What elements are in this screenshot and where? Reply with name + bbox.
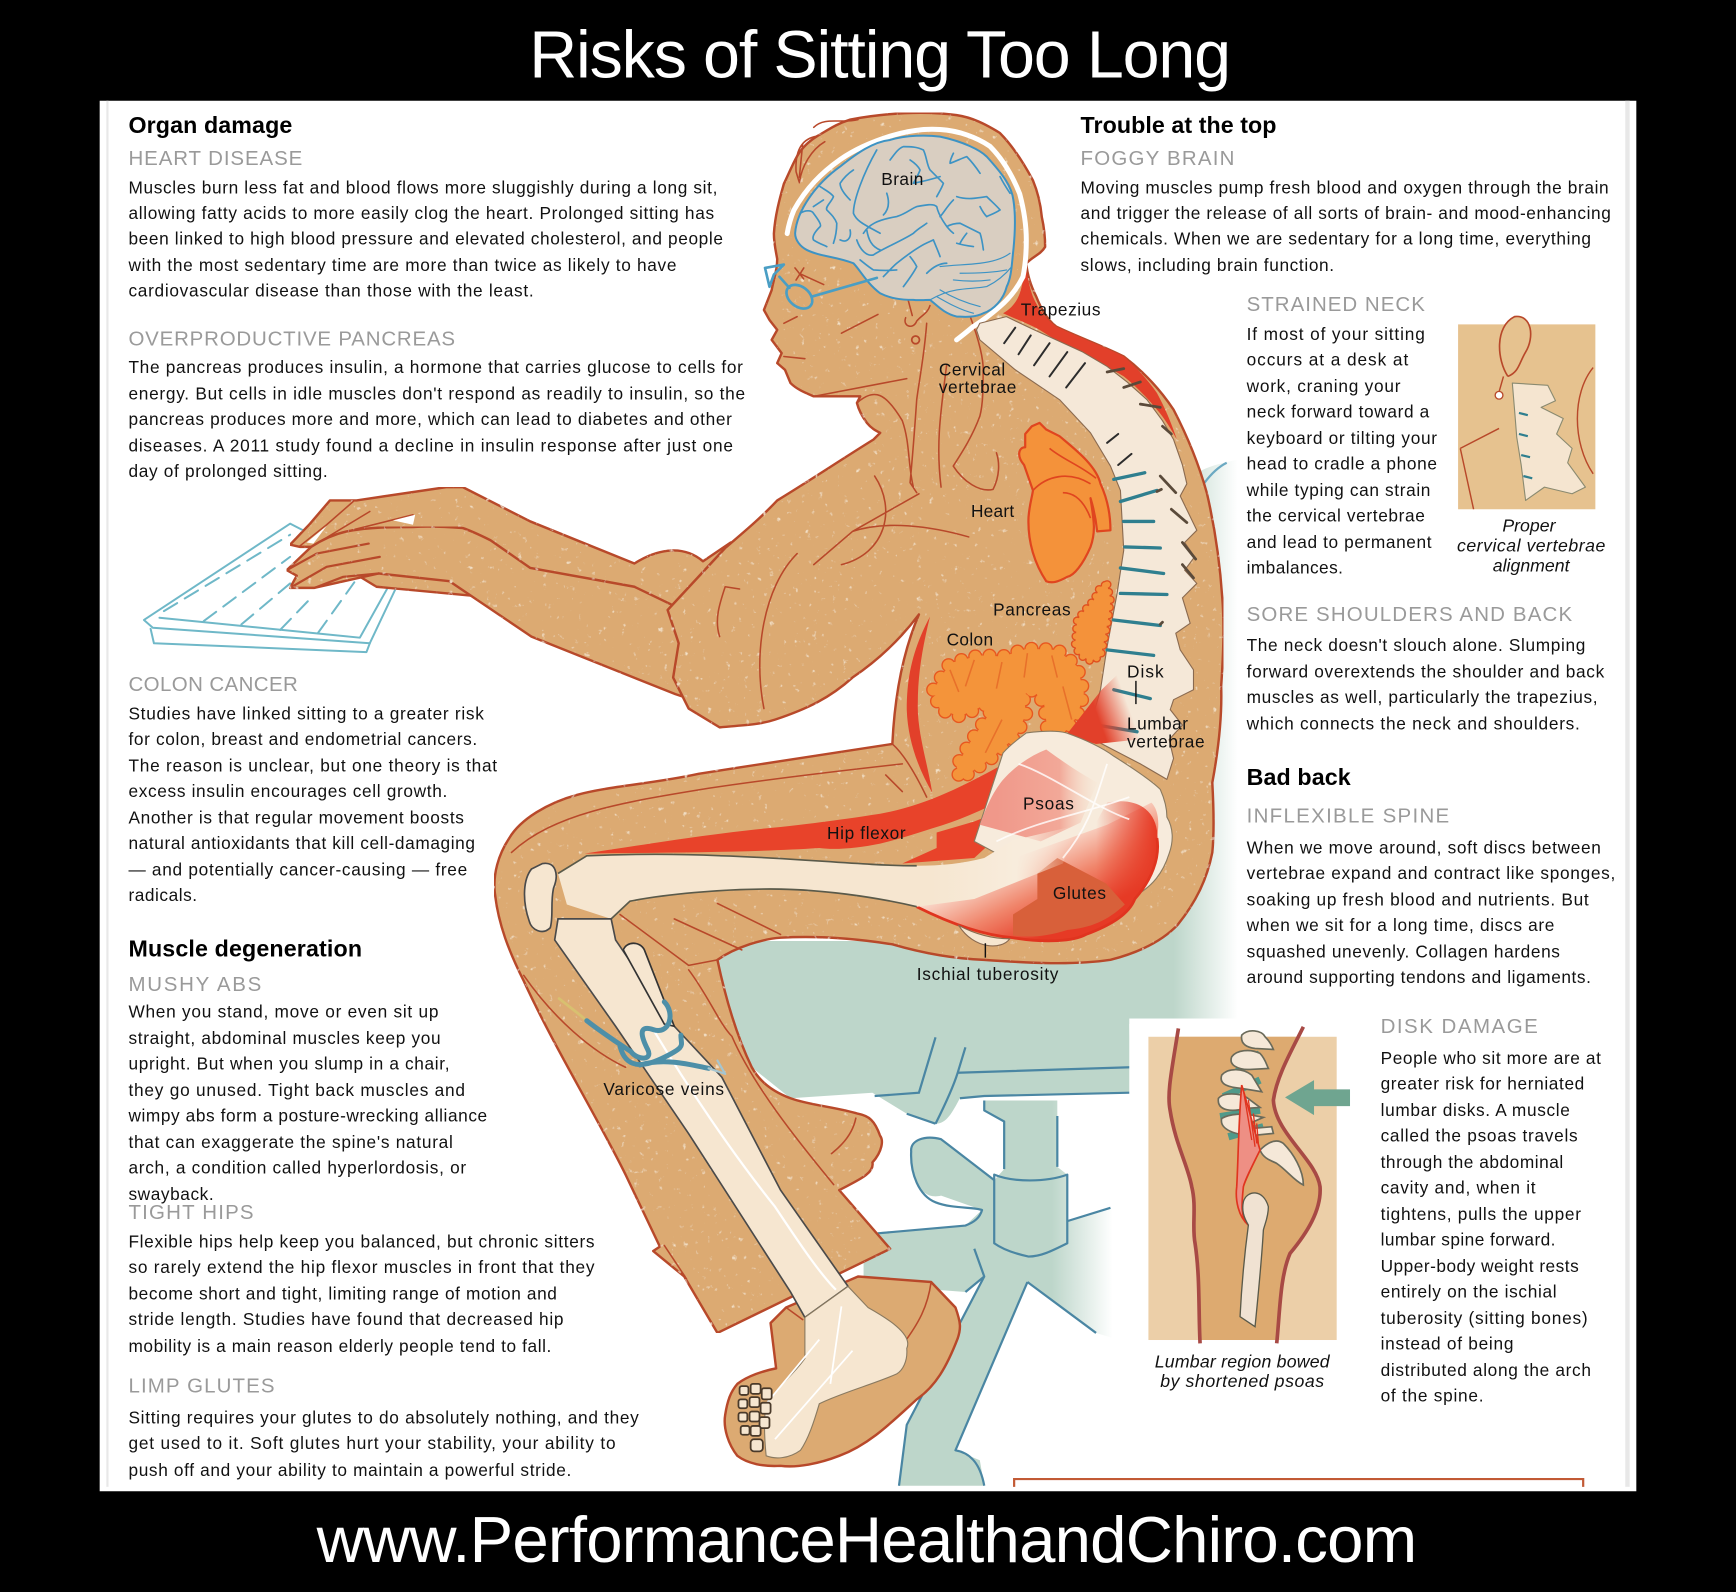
label: colon: Colon: [947, 629, 993, 649]
section: strained neck: and lead to permanent: [1247, 532, 1432, 552]
figure details: [512, 120, 999, 1279]
heart: [1019, 423, 1110, 582]
spine: [976, 317, 1197, 779]
section: disk damage: Upper-body weight rests: [1381, 1256, 1579, 1276]
section: tight hips: so rarely extend the hip flexor muscles in front that they: [128, 1257, 595, 1277]
section: foggy brain: chemicals. When we are sedentary for a long time, everything: [1081, 229, 1591, 249]
section: inflexible spine: around supporting tendons and ligaments.: [1247, 967, 1591, 987]
hip flexor muscle: [585, 766, 1013, 854]
skull line: [787, 129, 1026, 340]
section: mushy abs: [127, 973, 487, 1204]
chair post outlines: [878, 1100, 1110, 1486]
section: inflexible spine: [1246, 805, 1615, 987]
lumbar psoas attachment: [1066, 664, 1138, 744]
column: trouble at the top: [1081, 112, 1611, 734]
section: colon cancer: [128, 673, 497, 905]
section: tight hips: mobility is a main reason elderly people tend to fall.: [128, 1336, 551, 1356]
section: heart disease: HEART DISEASE: [128, 147, 302, 170]
varicose veins: [559, 999, 725, 1074]
foot and ankle skin: [725, 1276, 960, 1466]
near forearm and hand: [287, 527, 692, 700]
label: ischial tuberosity: Ischial tuberosity: [917, 964, 1059, 984]
ischial tuberosity leader: [984, 943, 986, 958]
chair base: [864, 1100, 1118, 1486]
section: strained neck: imbalances.: [1247, 557, 1343, 577]
section: disk damage: distributed along the arch: [1381, 1360, 1591, 1380]
section: tight hips: become short and tight, limiting range of motion and: [128, 1284, 557, 1304]
section: disk damage: tuberosity (sitting bones): [1381, 1308, 1588, 1328]
label: lumbar vertebrae: [1127, 714, 1205, 751]
website footer: www.PerformanceHealthandChiro.com: [316, 1503, 1417, 1576]
section: overproductive pancreas: pancreas produces more and more, which can lead to diabetes and other: [128, 409, 732, 429]
label: pancreas: Pancreas: [993, 600, 1071, 620]
section: overproductive pancreas: [128, 327, 745, 481]
section: strained neck: while typing can strain: [1246, 480, 1430, 500]
section: inflexible spine: soaking up fresh blood and nutrients. But: [1247, 890, 1589, 910]
section: strained neck: STRAINED NECK: [1247, 293, 1425, 316]
section: limp glutes: get used to it. Soft glutes hurt your stability, your ability to: [128, 1433, 616, 1453]
section: mushy abs: When you stand, move or even sit up: [128, 1001, 438, 1021]
section: mushy abs: wimpy abs form a posture-wrecking alliance: [127, 1105, 487, 1125]
section: colon cancer: natural antioxidants that kill cell-damaging: [128, 833, 475, 853]
section: strained neck: keyboard or tilting your: [1247, 428, 1437, 448]
section: inflexible spine: INFLEXIBLE SPINE: [1247, 805, 1449, 828]
keyboard: [144, 524, 400, 652]
gaps between hands: [307, 515, 415, 544]
figure body and trousers: [494, 113, 1223, 1333]
section: inflexible spine: vertebrae expand and contract like sponges,: [1247, 863, 1615, 883]
section: disk damage: lumbar disks. A muscle: [1381, 1100, 1570, 1120]
caption: lumbar region bowed: by shortened psoas: [1160, 1371, 1324, 1391]
section: limp glutes: Sitting requires your glutes to do absolutely nothing, and they: [128, 1408, 639, 1428]
section: colon cancer: COLON CANCER: [128, 673, 298, 696]
section: overproductive pancreas: The pancreas produces insulin, a hormone that carries glucose to cells for: [128, 357, 743, 377]
section: colon cancer: The reason is unclear, but one theory is that: [128, 756, 497, 776]
section: sore shoulders and back: muscles as well, particularly the trapezius,: [1247, 687, 1598, 707]
toes: [738, 1384, 772, 1451]
caption: proper cervical vertebrae alignment: [1457, 515, 1605, 575]
section: overproductive pancreas: day of prolonged sitting.: [128, 461, 328, 481]
pancreas: [1075, 585, 1110, 661]
glasses: [765, 265, 877, 313]
section: mushy abs: they go unused. Tight back muscles and: [128, 1080, 465, 1100]
section: colon cancer: Studies have linked sitting to a greater risk: [128, 704, 484, 724]
section: disk damage: instead of being: [1381, 1334, 1513, 1354]
section: heart disease: [127, 147, 723, 301]
title: Risks of Sitting Too Long: [529, 18, 1231, 92]
section: disk damage: entirely on the ischial: [1381, 1282, 1557, 1302]
section: overproductive pancreas: energy. But cells in idle muscles don't respond as readily to insulin, so the: [128, 384, 745, 404]
section: disk damage: tightens, pulls the upper: [1381, 1204, 1581, 1224]
section: strained neck: If most of your sitting: [1247, 324, 1425, 344]
section: sore shoulders and back: which connects the neck and shoulders.: [1246, 714, 1580, 734]
caption: proper cervical vertebrae alignment: alignment: [1493, 555, 1571, 575]
pelvis and glutes: [917, 731, 1172, 946]
section: foggy brain: Moving muscles pump fresh blood and oxygen through the brain: [1081, 178, 1609, 198]
colon: [933, 649, 1084, 779]
section: strained neck: work, craning your: [1246, 376, 1401, 396]
spine discs: [1097, 473, 1167, 732]
ischial bone: [959, 926, 1010, 946]
label: brain: Brain: [881, 169, 923, 189]
foot bones: [738, 1286, 908, 1458]
section: overproductive pancreas: diseases. A 2011 study found a decline in insulin response after just one: [128, 436, 733, 456]
section: heart disease: cardiovascular disease than those with the least.: [128, 281, 534, 301]
section: disk damage: called the psoas travels: [1381, 1125, 1578, 1145]
label: varicose veins: Varicose veins: [603, 1079, 724, 1099]
label: heart: Heart: [971, 501, 1014, 521]
section: mushy abs: that can exaggerate the spine's natural: [128, 1132, 453, 1152]
face lines: [784, 268, 878, 359]
section: mushy abs: straight, abdominal muscles keep you: [128, 1028, 441, 1048]
clothing folds: [512, 554, 927, 1279]
label: cervical vertebrae: [939, 359, 1016, 397]
tibia and fibula: [555, 919, 848, 1317]
white content panel: [100, 101, 1636, 1491]
femur: [558, 825, 1079, 919]
section: strained neck: neck forward toward a: [1247, 401, 1430, 421]
caption: proper cervical vertebrae alignment: cervical vertebrae: [1457, 535, 1605, 555]
label: cervical vertebrae: Cervical: [939, 359, 1005, 379]
label: lumbar vertebrae: Lumbar: [1127, 714, 1188, 734]
abdominal muscle: [907, 617, 932, 793]
caption: lumbar region bowed: [1155, 1351, 1331, 1391]
section: sore shoulders and back: forward overextends the shoulder and back: [1247, 662, 1605, 682]
heading: trouble at the top: Trouble at the top: [1081, 112, 1277, 138]
section: strained neck: head to cradle a phone: [1247, 453, 1437, 473]
section: mushy abs: arch, a condition called hyperlordosis, or: [128, 1158, 466, 1178]
inset: lumbar region: [1129, 1019, 1373, 1362]
label: trapezius: Trapezius: [1021, 300, 1101, 320]
section: colon cancer: — and potentially cancer-causing — free: [128, 860, 467, 880]
section: sore shoulders and back: [1246, 603, 1605, 734]
column: bad back: [1246, 764, 1615, 1406]
column: muscle degeneration: [127, 936, 639, 1480]
caption: proper cervical vertebrae alignment: Proper: [1502, 515, 1557, 535]
section: disk damage: [1381, 1015, 1601, 1406]
section: limp glutes: [128, 1375, 639, 1480]
heading: muscle degeneration: Muscle degeneration: [128, 936, 362, 962]
section: overproductive pancreas: OVERPRODUCTIVE PANCREAS: [128, 327, 455, 350]
section: colon cancer: for colon, breast and endometrial cancers.: [128, 729, 477, 749]
heading: organ damage: Organ damage: [128, 112, 292, 138]
section: disk damage: greater risk for herniated: [1381, 1073, 1584, 1093]
illustration: seated figure: [144, 113, 1238, 1486]
caption: lumbar region bowed: Lumbar region bowed: [1155, 1351, 1331, 1371]
section: inflexible spine: squashed unevenly. Collagen hardens: [1247, 942, 1560, 962]
section: disk damage: cavity and, when it: [1381, 1177, 1536, 1197]
label: glutes: Glutes: [1053, 883, 1106, 903]
section: mushy abs: swayback.: [128, 1184, 214, 1204]
hair bun: [796, 120, 858, 183]
chair: [709, 459, 1238, 1486]
section: mushy abs: upright. But when you slump in a chair,: [128, 1053, 450, 1073]
section: sore shoulders and back: SORE SHOULDERS AND BACK: [1247, 603, 1572, 626]
hair strands and neck lines: [814, 307, 999, 565]
section: heart disease: allowing fatty acids to more easily clog the heart. Prolonged sitting has: [128, 203, 714, 223]
label: hip flexor: Hip flexor: [827, 823, 906, 843]
section: disk damage: lumbar spine forward.: [1381, 1229, 1556, 1249]
section: heart disease: with the most sedentary time are more than twice as likely to have: [127, 255, 676, 275]
section: colon cancer: Another is that regular movement boosts: [128, 808, 464, 828]
section: tight hips: [128, 1201, 595, 1356]
section: limp glutes: push off and your ability to maintain a powerful stride.: [128, 1460, 571, 1480]
section: inflexible spine: When we move around, soft discs between: [1247, 838, 1601, 858]
section: foggy brain: [1081, 147, 1611, 275]
section: heart disease: been linked to high blood pressure and elevated cholesterol, and people: [128, 229, 723, 249]
section: disk damage: of the spine.: [1381, 1386, 1484, 1406]
section: disk damage: through the abdominal: [1381, 1152, 1563, 1172]
far hand details: [300, 502, 413, 547]
brain: [795, 136, 1015, 317]
section: tight hips: Flexible hips help keep you balanced, but chronic sitters: [128, 1232, 595, 1252]
section: foggy brain: and trigger the release of all sorts of brain- and mood-enhancing: [1081, 203, 1611, 223]
scale bar: [1014, 1479, 1583, 1487]
trapezius muscle: [1003, 263, 1177, 440]
section: heart disease: Muscles burn less fat and blood flows more sluggishly during a long sit,: [128, 178, 717, 198]
section: limp glutes: LIMP GLUTES: [128, 1375, 275, 1398]
section: strained neck: the cervical vertebrae: [1247, 505, 1425, 525]
section: colon cancer: radicals.: [128, 885, 197, 905]
far arm and hand: [290, 487, 731, 620]
label: cervical vertebrae: vertebrae: [939, 377, 1016, 397]
section: sore shoulders and back: The neck doesn't slouch alone. Slumping: [1247, 635, 1585, 655]
section: tight hips: TIGHT HIPS: [128, 1201, 254, 1224]
label: disk: Disk: [1127, 662, 1164, 682]
label: psoas: Psoas: [1023, 793, 1074, 813]
section: tight hips: stride length. Studies have found that decreased hip: [128, 1309, 564, 1329]
patella: [524, 863, 556, 931]
column: organ damage: [127, 112, 745, 905]
heading: bad back: Bad back: [1247, 764, 1351, 790]
section: disk damage: DISK DAMAGE: [1381, 1015, 1538, 1038]
section: strained neck: occurs at a desk at: [1247, 349, 1408, 369]
arrow: [1285, 1080, 1350, 1115]
disk leader: [1135, 681, 1137, 704]
section: foggy brain: slows, including brain function.: [1081, 255, 1334, 275]
label: lumbar vertebrae: vertebrae: [1127, 731, 1205, 751]
inset: proper cervical alignment: [1458, 316, 1595, 509]
section: inflexible spine: when we sit for a long time, discs are: [1246, 915, 1554, 935]
chair backrest and seat: [709, 459, 1238, 1124]
section: disk damage: People who sit more are at: [1381, 1048, 1601, 1068]
anatomy labels: [603, 169, 1205, 1099]
section: strained neck: [1246, 293, 1437, 577]
section: colon cancer: excess insulin encourages cell growth.: [128, 781, 447, 801]
section: foggy brain: FOGGY BRAIN: [1081, 147, 1234, 170]
section: mushy abs: MUSHY ABS: [128, 973, 261, 996]
